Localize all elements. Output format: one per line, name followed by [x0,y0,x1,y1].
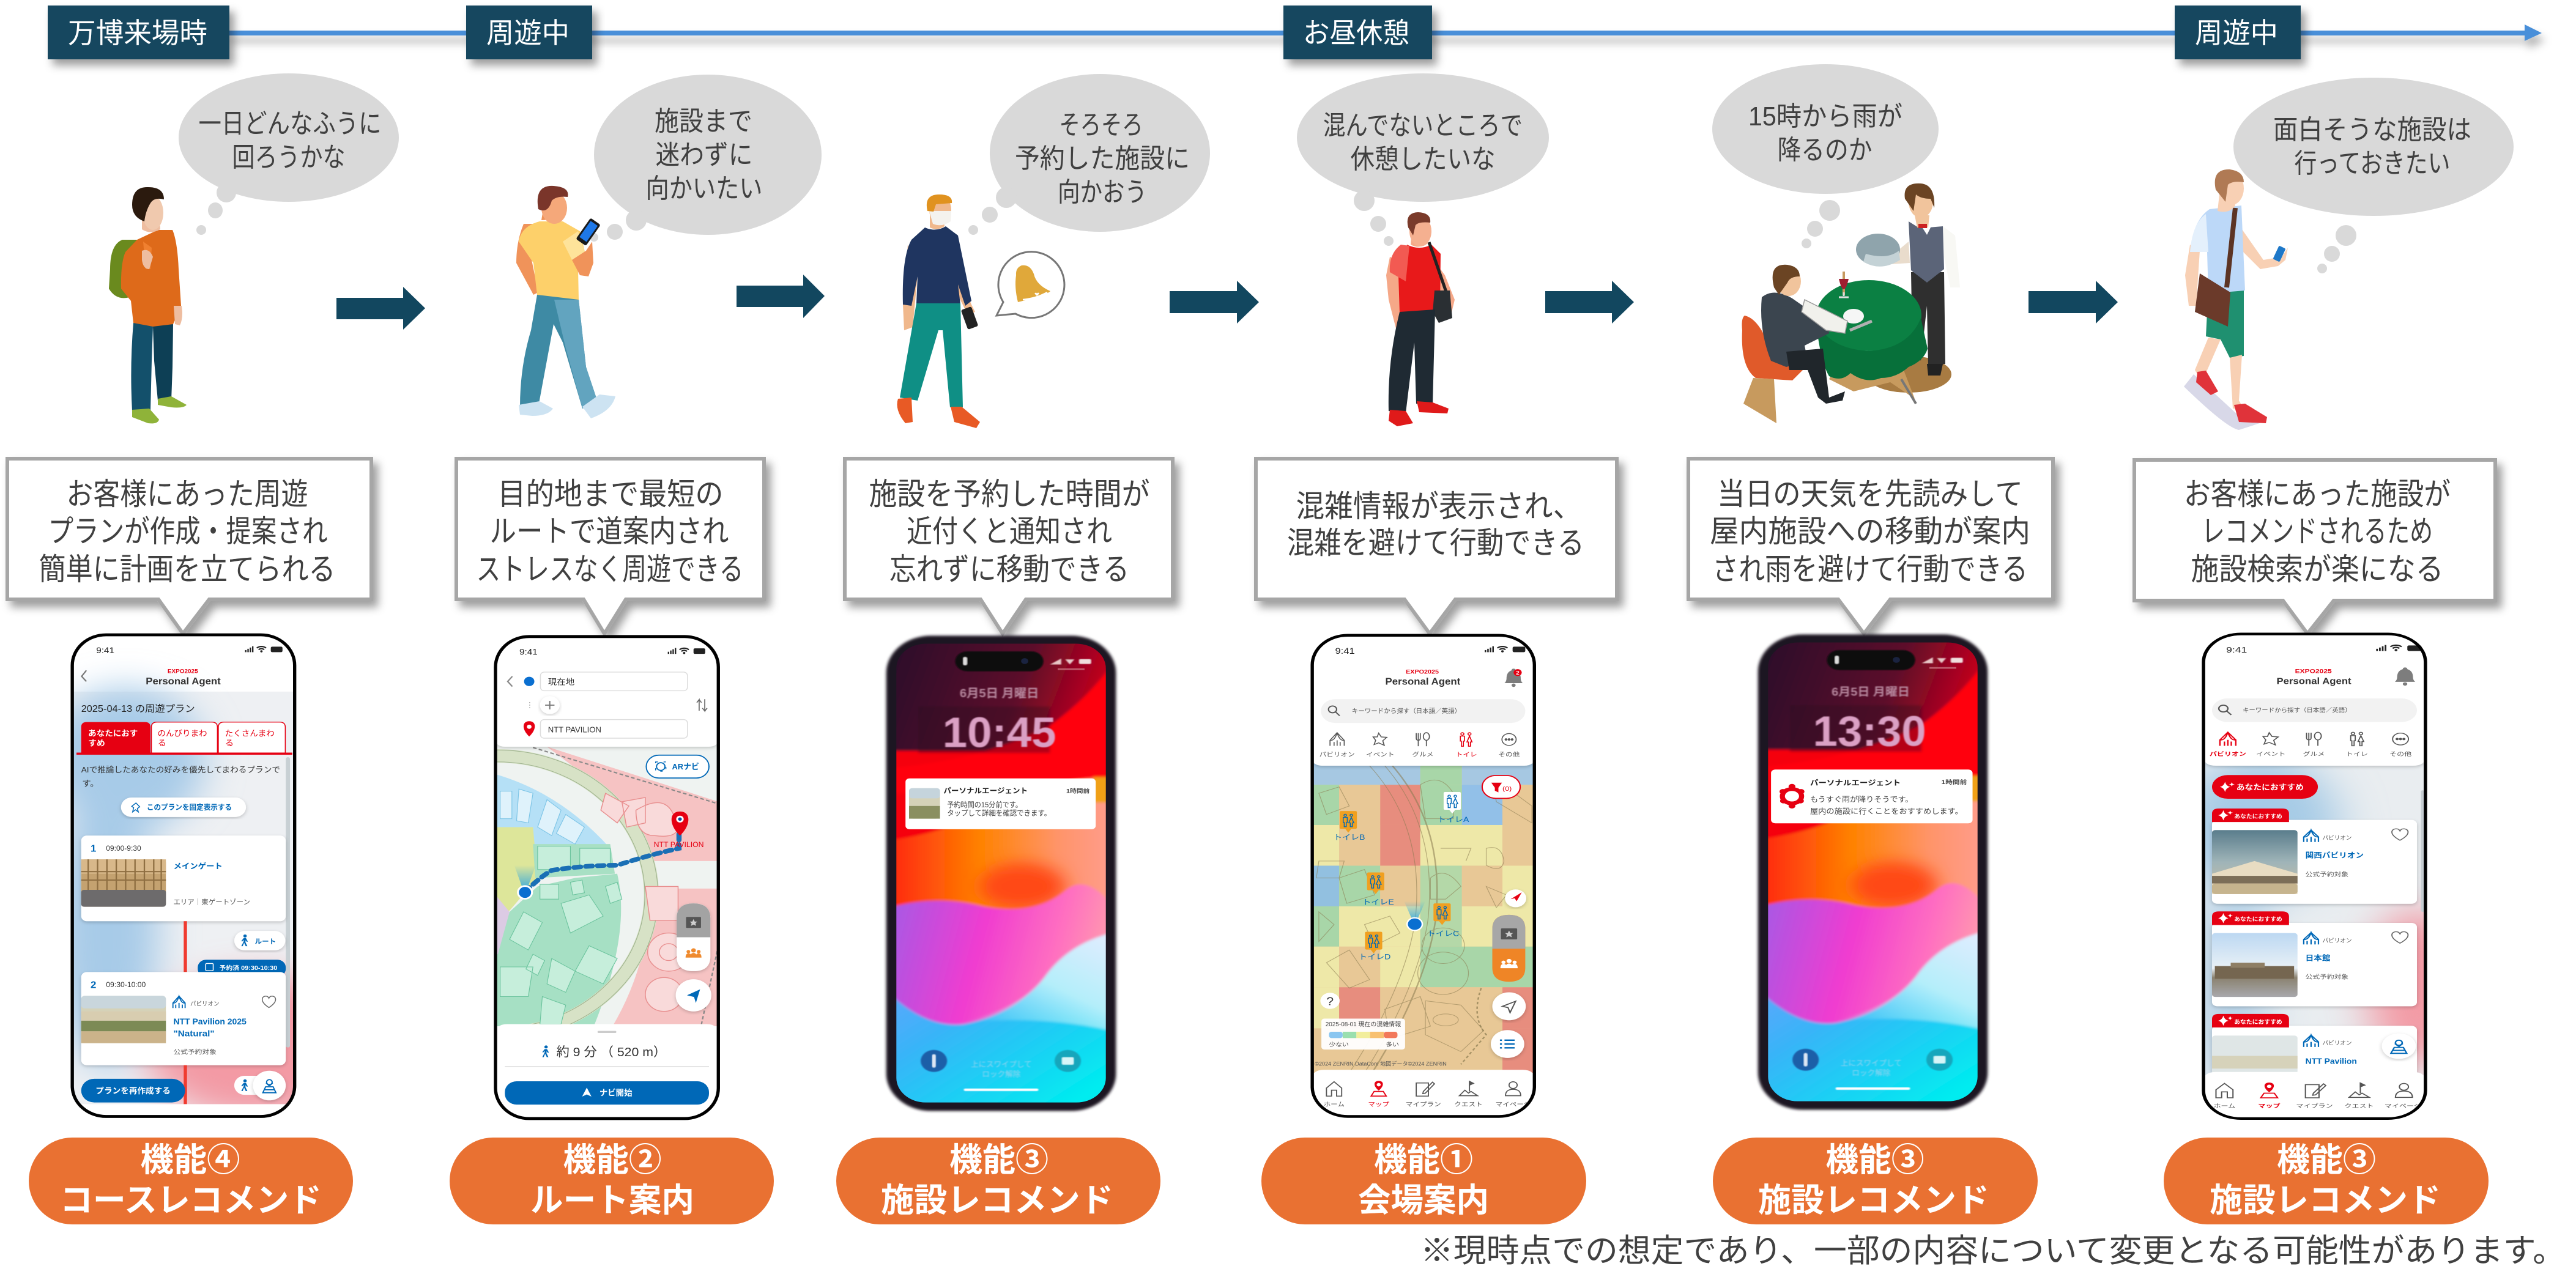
timeline label: お昼休憩 [1283,6,1432,59]
callout text 5: 当日の天気を先読みして [1717,477,2023,511]
callout text 3: 忘れずに移動できる [889,552,1129,587]
recommended card 2 [2212,911,2417,1006]
phone 4: venue congestion map: ホーム [1324,1101,1345,1108]
phone 1: course recommendation: 09:30-10:00 [106,981,146,989]
icon: bell notification bubble [997,252,1064,318]
thought bubble 4: 休憩したいな [1351,144,1495,174]
thought bubble 4: 混んでないところで [1323,111,1523,141]
feature pill 5: 機能③ [1825,1142,1925,1179]
timeline label: 万博来場時 [48,6,229,59]
phone 1: course recommendation: る [157,738,166,747]
phone 1: course recommendation: すめ [88,738,105,747]
phone 2: route guidance: NTT PAVILION [548,725,601,734]
notification card: パーソナルエージェント [943,786,1028,795]
arrow 1 [336,287,425,330]
recommended card 1: パビリオン [2322,835,2352,842]
callout 3 [845,459,1173,634]
phone 1: course recommendation: たくさんまわ [225,728,275,738]
phone 1: course recommendation: Personal Agent [146,676,221,687]
feature pill 4: 会場案内 [1358,1182,1489,1219]
feature pill 1: 機能④ [141,1142,240,1179]
phone 1: course recommendation: "Natural" [173,1029,215,1038]
phone 1: course recommendation: EXPO2025 [168,668,198,675]
congestion heat map: トイレB [1334,833,1365,842]
timeline label: 万博来場時: 万博来場時 [68,17,207,49]
phone 3: lock screen notification 10:45: ロック解除 [982,1070,1021,1078]
notification card: 屋内の施設に行くことをおすすめします。 [1810,807,1963,815]
recommended card 2: 日本館 [2306,954,2331,962]
callout 5 [1688,459,2053,634]
route map [497,745,717,1026]
callout text 4 [1287,489,1584,560]
thought bubble 5 [1712,64,1939,248]
footnote: ※現時点での想定であり、一部の内容について変更となる可能性があります。 [1420,1233,2566,1269]
phone 4: venue congestion map: EXPO2025 [1406,669,1439,675]
callout 2 [456,459,764,634]
recommended card 2: 公式予約対象 [2306,973,2348,980]
phone 6: facility recommendation: マップ [2258,1103,2281,1109]
callout text 5: 屋内施設への移動が案内 [1710,514,2030,549]
thought bubble 2 [590,75,822,242]
phone 2: route guidance: 約 9 分 （ 520 m） [556,1045,666,1059]
callout text 3: 近付くと通知され [907,514,1112,549]
phone 5: lock screen rain notification 13:30: 上にスワイプして [1841,1059,1902,1068]
timeline label: 周遊中: 周遊中 [486,17,570,49]
feature pill 2: ルート案内 [530,1182,694,1219]
feature pill 6: 施設レコメンド [2210,1182,2441,1219]
phone 6: facility recommendation: 9:41 [2226,646,2247,654]
person 5: restaurant scene [1742,183,1960,423]
phone 6: facility recommendation: あなたにおすすめ [2236,783,2304,792]
feature pill 5: 施設レコメンド [1758,1182,1989,1219]
callout text 5: され雨を避けて行動できる [1712,552,2028,587]
recommended card 3 [2210,1014,2419,1073]
recommended card 1: あなたにおすすめ [2234,813,2282,820]
phone 1: course recommendation: AIで推論したあなたの好みを優先してまわるプランで [81,765,280,774]
phone 1: course recommendation: ルート [255,938,276,946]
callout text 4: 混雑を避けて行動できる [1287,526,1584,560]
phone 6: facility recommendation: マイプラン [2296,1103,2333,1109]
callout text 6 [2184,477,2451,587]
phone 1: course recommendation: このプランを固定表示する [147,803,232,812]
feature pill 4 [1261,1138,1586,1224]
route map: NTT PAVILION [654,841,704,849]
callout text 2: ストレスなく周遊できる [476,552,744,587]
phone 2: route guidance: 9:41 [519,648,538,657]
callout text 2: 目的地まで最短の [498,477,723,511]
phone 6: facility recommendation: トイレ [2346,751,2368,758]
feature pill 2: 機能② [563,1142,662,1179]
notification card: 1時間前 [1942,779,1967,785]
feature pill 3: 機能③ [949,1142,1049,1179]
phone 3: lock screen notification 10:45: 6月5日 月曜日 [960,687,1039,700]
thought bubble 2: 向かいたい [646,174,762,204]
phone 1: course recommendation: 1 [91,843,96,854]
congestion heat map: トイレA [1438,815,1469,824]
phone 4: venue congestion map: クエスト [1454,1101,1483,1108]
phone 1: course recommendation: す。 [82,779,99,788]
phone 4: venue congestion map: Personal Agent [1386,676,1461,687]
callout text 3 [869,477,1150,587]
notification card [905,779,1096,829]
thought bubble 5: 15時から雨が [1748,102,1902,131]
callout text 1: プランが作成・提案され [48,514,328,549]
feature pill 4: 機能① [1374,1142,1473,1179]
phone 2: route guidance [494,635,720,1120]
phone 4: venue congestion map: イベント [1366,752,1394,758]
notification card [1771,769,1973,823]
thought bubble 2: 施設まで [655,106,752,136]
phone 1: course recommendation: のんびりまわ [157,728,207,738]
thought bubble 1 [179,73,399,235]
congestion legend: 2025-08-01 現在の混雑情報 [1326,1021,1401,1028]
phone 6: facility recommendation [2202,632,2427,1120]
arrow 2 [737,275,825,318]
timeline arrow [226,24,2542,41]
thought bubble 3: 向かおう [1058,177,1147,207]
recommended card 3: あなたにおすすめ [2234,1019,2282,1025]
phone 4: venue congestion map: パビリオン [1320,752,1355,758]
thought bubble 6 [2233,78,2514,273]
thought bubble 1: 一日どんなふうに [198,109,382,139]
thought bubble 3: そろそろ [1060,110,1143,140]
callout 6 [2134,460,2495,634]
phone 6: facility recommendation: マイページ [2385,1103,2421,1109]
phone 4: venue congestion map: グルメ [1412,751,1433,758]
phone 6: facility recommendation: ホーム [2214,1103,2235,1109]
feature pill 3: 施設レコメンド [881,1182,1113,1219]
person 1: backpack visitor [109,187,187,423]
thought bubble 3: 予約した施設に [1015,144,1190,174]
phone 4: venue congestion map: トイレ [1456,752,1477,758]
phone 4: venue congestion map: 9:41 [1335,646,1355,656]
phone 5: lock screen rain notification 13:30: ロック解除 [1852,1068,1891,1078]
congestion legend [1321,1019,1405,1049]
callout text 1 [39,477,335,587]
callout text 1: お客様にあった周遊 [66,477,308,511]
congestion heat map: トイレC [1427,930,1459,938]
phone 6: facility recommendation: Personal Agent [2276,676,2351,686]
phone 4: venue congestion map [1312,635,1534,1117]
phone 2: route guidance: ARナビ [672,762,699,771]
phone 6: facility recommendation: EXPO2025 [2295,668,2332,675]
callout text 6: 施設検索が楽になる [2191,552,2443,587]
phone 2: route guidance: ナビ開始 [599,1087,633,1098]
phone 1: course recommendation: メインゲート [173,861,223,870]
callout 4 [1256,459,1617,634]
phone 6: facility recommendation: キーワードから探す（日本語／英語） [2243,706,2351,714]
thought bubble 4 [1297,73,1549,246]
thought bubble 1: 回ろうかな [232,142,345,172]
notification card: 予約時間の15分前です。 [947,801,1022,809]
phone 3: lock screen notification 10:45: 上にスワイプして [971,1060,1032,1068]
thought bubble 5: 降るのか [1778,135,1872,165]
arrow 3 [1170,281,1259,324]
callout text 2: ルートで道案内され [489,514,729,549]
timeline label: お昼休憩: お昼休憩 [1303,17,1409,49]
thought bubble 6: 面白そうな施設は [2273,115,2471,145]
arrow 5 [2029,281,2118,324]
recommended card 1: 関西パビリオン [2306,851,2364,859]
phone 1: course recommendation: パビリオン [190,1001,219,1008]
phone 5: lock screen rain notification 13:30: 13:30 [1813,708,1926,755]
callout text 4: 混雑情報が表示され、 [1296,489,1582,524]
feature pill 2 [450,1138,774,1224]
phone 1: course recommendation [70,634,296,1118]
recommended card 1: 公式予約対象 [2306,870,2348,878]
phone 1: course recommendation: 9:41 [96,646,114,656]
congestion heat map: ? [1326,996,1334,1008]
congestion legend: 少ない [1329,1041,1349,1048]
callout text 2 [476,477,744,587]
phone 1: course recommendation: NTT Pavilion 2025 [173,1018,247,1027]
phone 1: course recommendation: 09:00-9:30 [106,845,141,853]
callout text 5 [1710,477,2030,587]
timeline label: 周遊中 [466,6,592,59]
callout 1 [7,459,371,634]
phone 1: course recommendation: プランを再作成する [95,1086,171,1095]
phone 6: facility recommendation: グルメ [2303,751,2325,758]
notification card: 1時間前 [1066,787,1089,794]
phone 1: course recommendation: 2 [91,980,96,990]
congestion heat map [1312,764,1534,1073]
phone 6: facility recommendation: クエスト [2345,1103,2374,1109]
person 6: walking with satchel [2184,169,2288,430]
phone 6: facility recommendation: その他 [2389,751,2412,758]
phone 6: facility recommendation: パビリオン [2210,751,2246,758]
timeline label: 周遊中 2 [2175,6,2301,59]
phone 1: course recommendation: 公式予約対象 [173,1048,217,1056]
congestion heat map: トイレD [1359,953,1390,961]
feature pill 5 [1713,1138,2038,1224]
callout text 3: 施設を予約した時間が [869,477,1150,511]
recommended card 1 [2212,809,2417,904]
phone 1: course recommendation: 2025-04-13 の周遊プラン [81,704,195,714]
phone 4: venue congestion map: マップ [1368,1101,1390,1108]
feature pill 6: 機能③ [2277,1142,2376,1179]
notification card: パーソナルエージェント [1810,779,1901,786]
phone 4: venue congestion map: 2 [1516,670,1520,676]
callout text 6: お客様にあった施設が [2184,477,2451,511]
phone 4: venue congestion map: キーワードから探す（日本語／英語） [1352,707,1461,715]
callout text 6: レコメンドされるため [2202,514,2433,549]
person 4: visitor with shoulder bag [1386,212,1455,426]
phone 1: course recommendation: 予約済 09:30-10:30 [219,964,278,972]
arrow 4 [1545,281,1634,324]
phone 1: course recommendation: る [225,738,234,747]
person 3: masked visitor with wallet [897,194,980,428]
recommended card 3: パビリオン [2322,1040,2352,1046]
phone 2: route guidance: 現在地 [548,677,574,687]
feature pill 6 [2164,1138,2489,1224]
feature pill 1 [29,1138,353,1224]
phone 1: course recommendation: エリア｜東ゲートゾーン [173,898,250,906]
feature pill 3 [836,1138,1160,1224]
notification card: もうすぐ雨が降りそうです。 [1810,795,1913,803]
phone 3: lock screen notification 10:45: 10:45 [943,709,1056,757]
phone 5: lock screen rain notification 13:30: 6月5日 月曜日 [1832,686,1910,698]
congestion heat map: ©2024 ZENRIN DataCom 地図データ©2024 ZENRIN [1315,1060,1447,1067]
phone 4: venue congestion map: マイページ [1496,1101,1531,1108]
phone 5: lock screen rain notification 13:30 [1758,634,1988,1109]
timeline label: 周遊中 2: 周遊中 [2195,17,2278,49]
phone 6: facility recommendation: イベント [2256,751,2285,758]
thought bubble 2: 迷わずに [656,140,752,170]
thought bubble 6: 行っておきたい [2294,149,2451,179]
congestion legend: 多い [1386,1041,1399,1048]
notification card: タップして詳細を確認できます。 [947,809,1051,817]
thought bubble 3 [968,74,1210,235]
congestion heat map: トイレE [1362,898,1394,906]
phone 1: course recommendation: あなたにおす [88,728,138,738]
recommended card 3: NTT Pavilion [2306,1057,2357,1066]
congestion heat map: (0) [1502,786,1512,793]
phone 4: venue congestion map: その他 [1498,751,1520,758]
callout text 1: 簡単に計画を立てられる [39,552,335,587]
feature pill 1: コースレコメンド [60,1182,322,1219]
phone 4: venue congestion map: マイプラン [1406,1101,1441,1108]
recommended card 2: あなたにおすすめ [2234,917,2282,923]
person 2: visitor looking at phone [516,186,615,418]
phone 3: lock screen notification 10:45 [886,635,1116,1111]
recommended card 2: パビリオン [2322,938,2352,944]
